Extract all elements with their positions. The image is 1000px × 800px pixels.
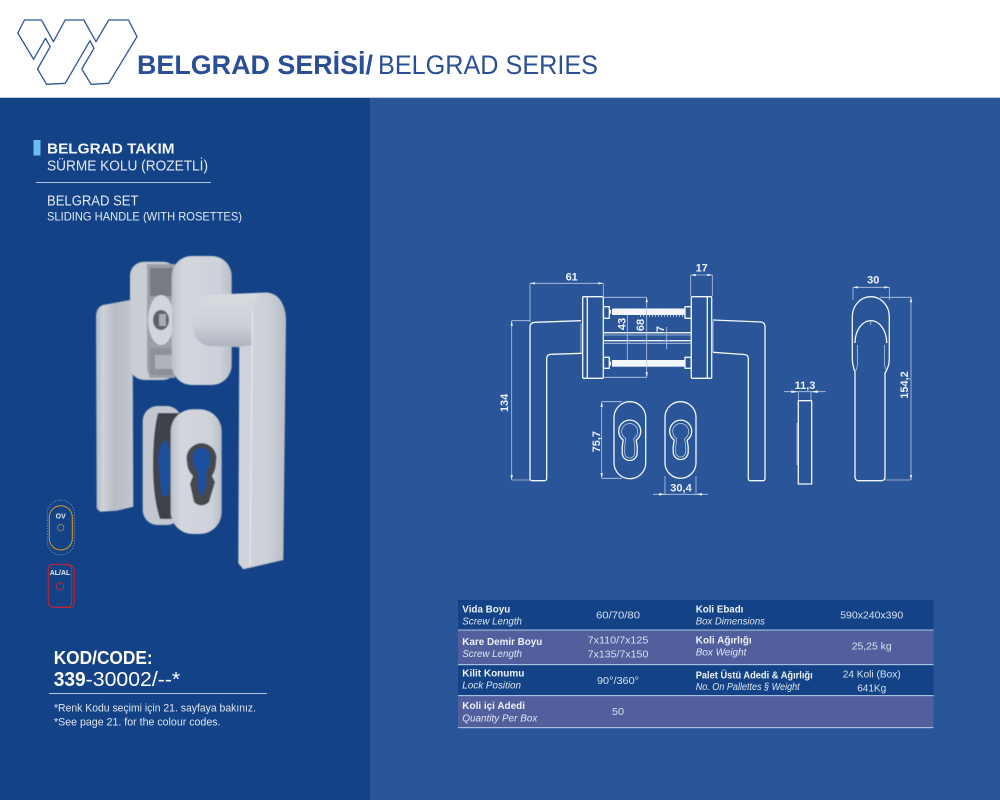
- row 4: Koli içi Adedi: [462, 701, 525, 712]
- row 1: Koli Ebadı: [696, 605, 744, 616]
- specification table: [458, 600, 934, 728]
- front rosette: [172, 256, 232, 385]
- row 2: Box Weight: [696, 648, 748, 659]
- title: BELGRAD SERİSİ/: [137, 50, 373, 80]
- dimension 30,4: [653, 476, 708, 496]
- dimension 61: 61: [566, 272, 578, 284]
- right panel: [370, 98, 1000, 800]
- left panel: [0, 98, 370, 800]
- row 1: 60/70/80: [596, 609, 640, 621]
- product photo: silver handle set: [96, 256, 286, 569]
- rear handle: [96, 300, 133, 512]
- row 4: 50: [612, 706, 624, 718]
- colour code note: *Renk Kodu seçimi için 21. sayfaya bakınız.: [54, 703, 256, 715]
- dimension 17: 17: [696, 263, 708, 275]
- row 1: [458, 600, 934, 630]
- product heading: [34, 140, 242, 224]
- dimension 134: 134: [499, 393, 511, 412]
- rosette side profile: [797, 401, 812, 484]
- row 2: [458, 631, 934, 664]
- row 1: Screw Length: [462, 616, 522, 627]
- screw bosses: [604, 307, 691, 368]
- product code: KOD/CODE:: [54, 648, 153, 668]
- handle neck shading: [192, 293, 262, 347]
- dimension 68: [604, 297, 648, 377]
- title: [137, 50, 598, 80]
- plain screw: [610, 360, 685, 367]
- right lever: [713, 320, 765, 481]
- colour swatch: OV: [47, 500, 74, 555]
- lower front rosette: [171, 409, 222, 534]
- row 2: Screw Length: [462, 649, 522, 660]
- row 1: 590x240x390: [840, 609, 903, 621]
- header band: [0, 0, 1000, 98]
- threaded screw: [610, 308, 685, 316]
- row 3: Lock Position: [462, 681, 521, 692]
- product heading: BELGRAD TAKIM: [47, 141, 174, 158]
- product heading: SÜRME KOLU (ROZETLİ): [47, 157, 208, 175]
- row 1: Box Dimensions: [696, 616, 765, 627]
- row 3: [458, 665, 934, 695]
- colour code note: *See page 21. for the colour codes.: [54, 717, 220, 729]
- row 3: 641Kg: [857, 683, 886, 695]
- left lever: [530, 321, 582, 481]
- dimension 30: [853, 274, 889, 300]
- dimension 30: 30: [867, 274, 879, 286]
- row 3: Palet Üstü Adedi & Ağırlığı: [696, 669, 813, 682]
- row 2: 25,25 kg: [852, 640, 892, 652]
- dimension 17: [691, 263, 712, 296]
- row 3: Kilit Konumu: [462, 669, 524, 680]
- square spindle: [604, 333, 691, 343]
- row 2: Kare Demir Boyu: [462, 637, 542, 648]
- technical drawing: front view: [499, 263, 765, 496]
- dimension 154,2: [880, 297, 912, 480]
- right rosette with keyhole: [665, 402, 696, 478]
- row 3: No. On Pallettes § Weight: [696, 682, 801, 693]
- colour code note: [54, 703, 256, 729]
- row 2: 7x135/7x150: [588, 648, 649, 660]
- row 4: [458, 696, 934, 727]
- row 1: Vida Boyu: [462, 605, 510, 616]
- right plate: [691, 297, 713, 378]
- row 2: Koli Ağırlığı: [696, 636, 752, 647]
- product code: -30002/--*: [86, 669, 180, 691]
- dimension 11,3: 11,3: [795, 380, 815, 392]
- dimension 61: [530, 272, 603, 322]
- product code: 339: [54, 669, 86, 691]
- product heading: BELGRAD SET: [47, 193, 139, 209]
- front handle: [192, 292, 286, 569]
- technical drawing: side views: [784, 274, 912, 484]
- front keyhole: [186, 443, 217, 506]
- dimension 68: 68: [635, 319, 647, 331]
- row 3: 90°/360°: [597, 675, 639, 687]
- row 3: 24 Koli (Box): [843, 668, 901, 680]
- product code: [49, 648, 267, 694]
- colour swatch: AL/AL: [48, 564, 74, 608]
- row 2: 7x110/7x125: [588, 634, 649, 646]
- dimension 7: 7: [655, 326, 667, 332]
- dimension 75,7: 75,7: [591, 431, 603, 452]
- dimension 30,4: 30,4: [670, 483, 693, 495]
- lower rear rosette: [143, 406, 182, 525]
- left rosette with keyhole: [614, 402, 646, 479]
- colour swatch: OV: OV: [56, 513, 66, 520]
- rear rosette: [130, 262, 177, 380]
- dimension 11,3: [784, 380, 826, 400]
- logo: [18, 20, 137, 84]
- dimension 43: 43: [616, 318, 628, 330]
- colour swatch: AL/AL: AL/AL: [50, 570, 71, 577]
- dimension 7: [655, 326, 670, 349]
- product heading: SLIDING HANDLE (WITH ROSETTES): [47, 210, 242, 224]
- title: BELGRAD SERIES: [378, 50, 598, 80]
- dimension 154,2: 154,2: [899, 371, 911, 399]
- handle edge profile: [852, 297, 889, 481]
- dimension 75,7: [591, 402, 622, 478]
- left plate: [581, 297, 603, 378]
- dimension 43: [616, 315, 628, 360]
- row 4: Quantity Per Box: [462, 713, 538, 724]
- dimension 134: [499, 321, 530, 480]
